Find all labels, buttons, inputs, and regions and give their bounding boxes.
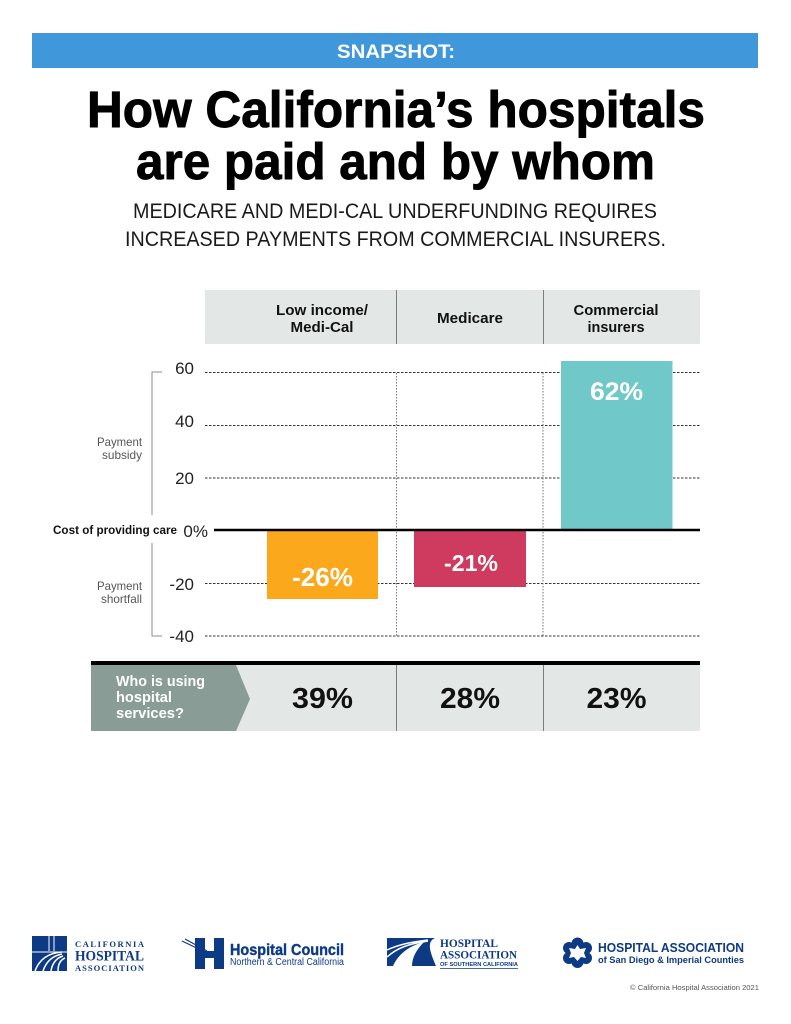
bracket: payment subsidy: Payment [97, 435, 143, 449]
y axis labels: 40 [175, 412, 194, 431]
column headers: Medi-Cal [290, 320, 354, 336]
bar: low income -26%: -26% [292, 562, 353, 592]
y axis labels: 0% [183, 522, 208, 541]
logo: California Hospital Association: CALIFORNIA [75, 939, 145, 949]
subtitle [125, 200, 666, 251]
logo: California Hospital Association: HOSPITAL [75, 948, 144, 964]
bracket: payment subsidy [97, 372, 162, 515]
bar chart [205, 361, 700, 636]
logo: Hospital Council: Hospital Council [230, 942, 344, 959]
usage row: 23% [586, 683, 647, 715]
bar: commercial insurers 62%: 62% [590, 378, 643, 406]
logo: Hospital Association of San Diego & Imperial Counties: HOSPITAL ASSOCIATION [598, 941, 744, 955]
usage row: 28% [440, 683, 500, 715]
logo: Hospital Council: Northern & Central California [230, 957, 344, 968]
y axis labels: 60 [175, 359, 194, 378]
axis label: cost of providing care: Cost of providing care [53, 523, 177, 537]
bracket: payment subsidy: subsidy [102, 448, 142, 462]
bar: commercial insurers 62% [561, 361, 672, 530]
logo: Hospital Association of Southern California: OF SOUTHERN CALIFORNIA [440, 962, 518, 968]
y axis labels: -40 [169, 627, 194, 646]
logo: Hospital Council [182, 938, 344, 969]
logo: California Hospital Association: ASSOCIATION [75, 963, 145, 973]
bar: medicare -21%: -21% [444, 550, 498, 576]
column headers: Commercial [574, 303, 658, 319]
bracket: payment shortfall [97, 543, 162, 636]
logo: Hospital Association of San Diego & Imperial Counties: of San Diego & Imperial Counties [598, 955, 744, 966]
banner: snapshot [32, 33, 758, 68]
logo: Hospital Association of Southern California [387, 936, 518, 968]
arrow label: who is using hospital services: services? [116, 706, 184, 722]
banner: snapshot: SNAPSHOT: [337, 42, 455, 63]
usage row [91, 661, 700, 731]
usage row: 39% [292, 683, 353, 715]
bracket: payment shortfall: Payment [97, 579, 143, 593]
column headers [205, 290, 700, 344]
subtitle: INCREASED PAYMENTS FROM COMMERCIAL INSURERS. [125, 228, 666, 251]
logo: Hospital Association of Southern California: HOSPITAL [440, 936, 498, 950]
title: How California’s hospitals [87, 81, 705, 138]
arrow label: who is using hospital services: hospital [116, 690, 172, 706]
bracket: payment shortfall: shortfall [101, 592, 142, 606]
arrow label: who is using hospital services: Who is using [116, 674, 205, 690]
subtitle: MEDICARE AND MEDI-CAL UNDERFUNDING REQUIRES [133, 200, 657, 223]
bar: low income -26% [267, 530, 378, 599]
y axis labels: -20 [169, 575, 194, 594]
copyright: © California Hospital Association 2021 [630, 983, 759, 992]
logo: Hospital Association of Southern California: ASSOCIATION [440, 948, 517, 962]
logo: Hospital Association of San Diego & Imperial Counties [563, 938, 744, 968]
arrow label: who is using hospital services [91, 665, 250, 731]
y axis labels: 20 [175, 469, 194, 488]
column headers: Medicare [437, 311, 503, 327]
y axis labels [169, 359, 208, 646]
bar: medicare -21% [414, 530, 526, 587]
title [87, 81, 705, 190]
logo: California Hospital Association [32, 936, 145, 973]
column headers: Low income/ [276, 303, 368, 319]
title: are paid and by whom [136, 133, 655, 190]
column headers: insurers [588, 320, 644, 336]
